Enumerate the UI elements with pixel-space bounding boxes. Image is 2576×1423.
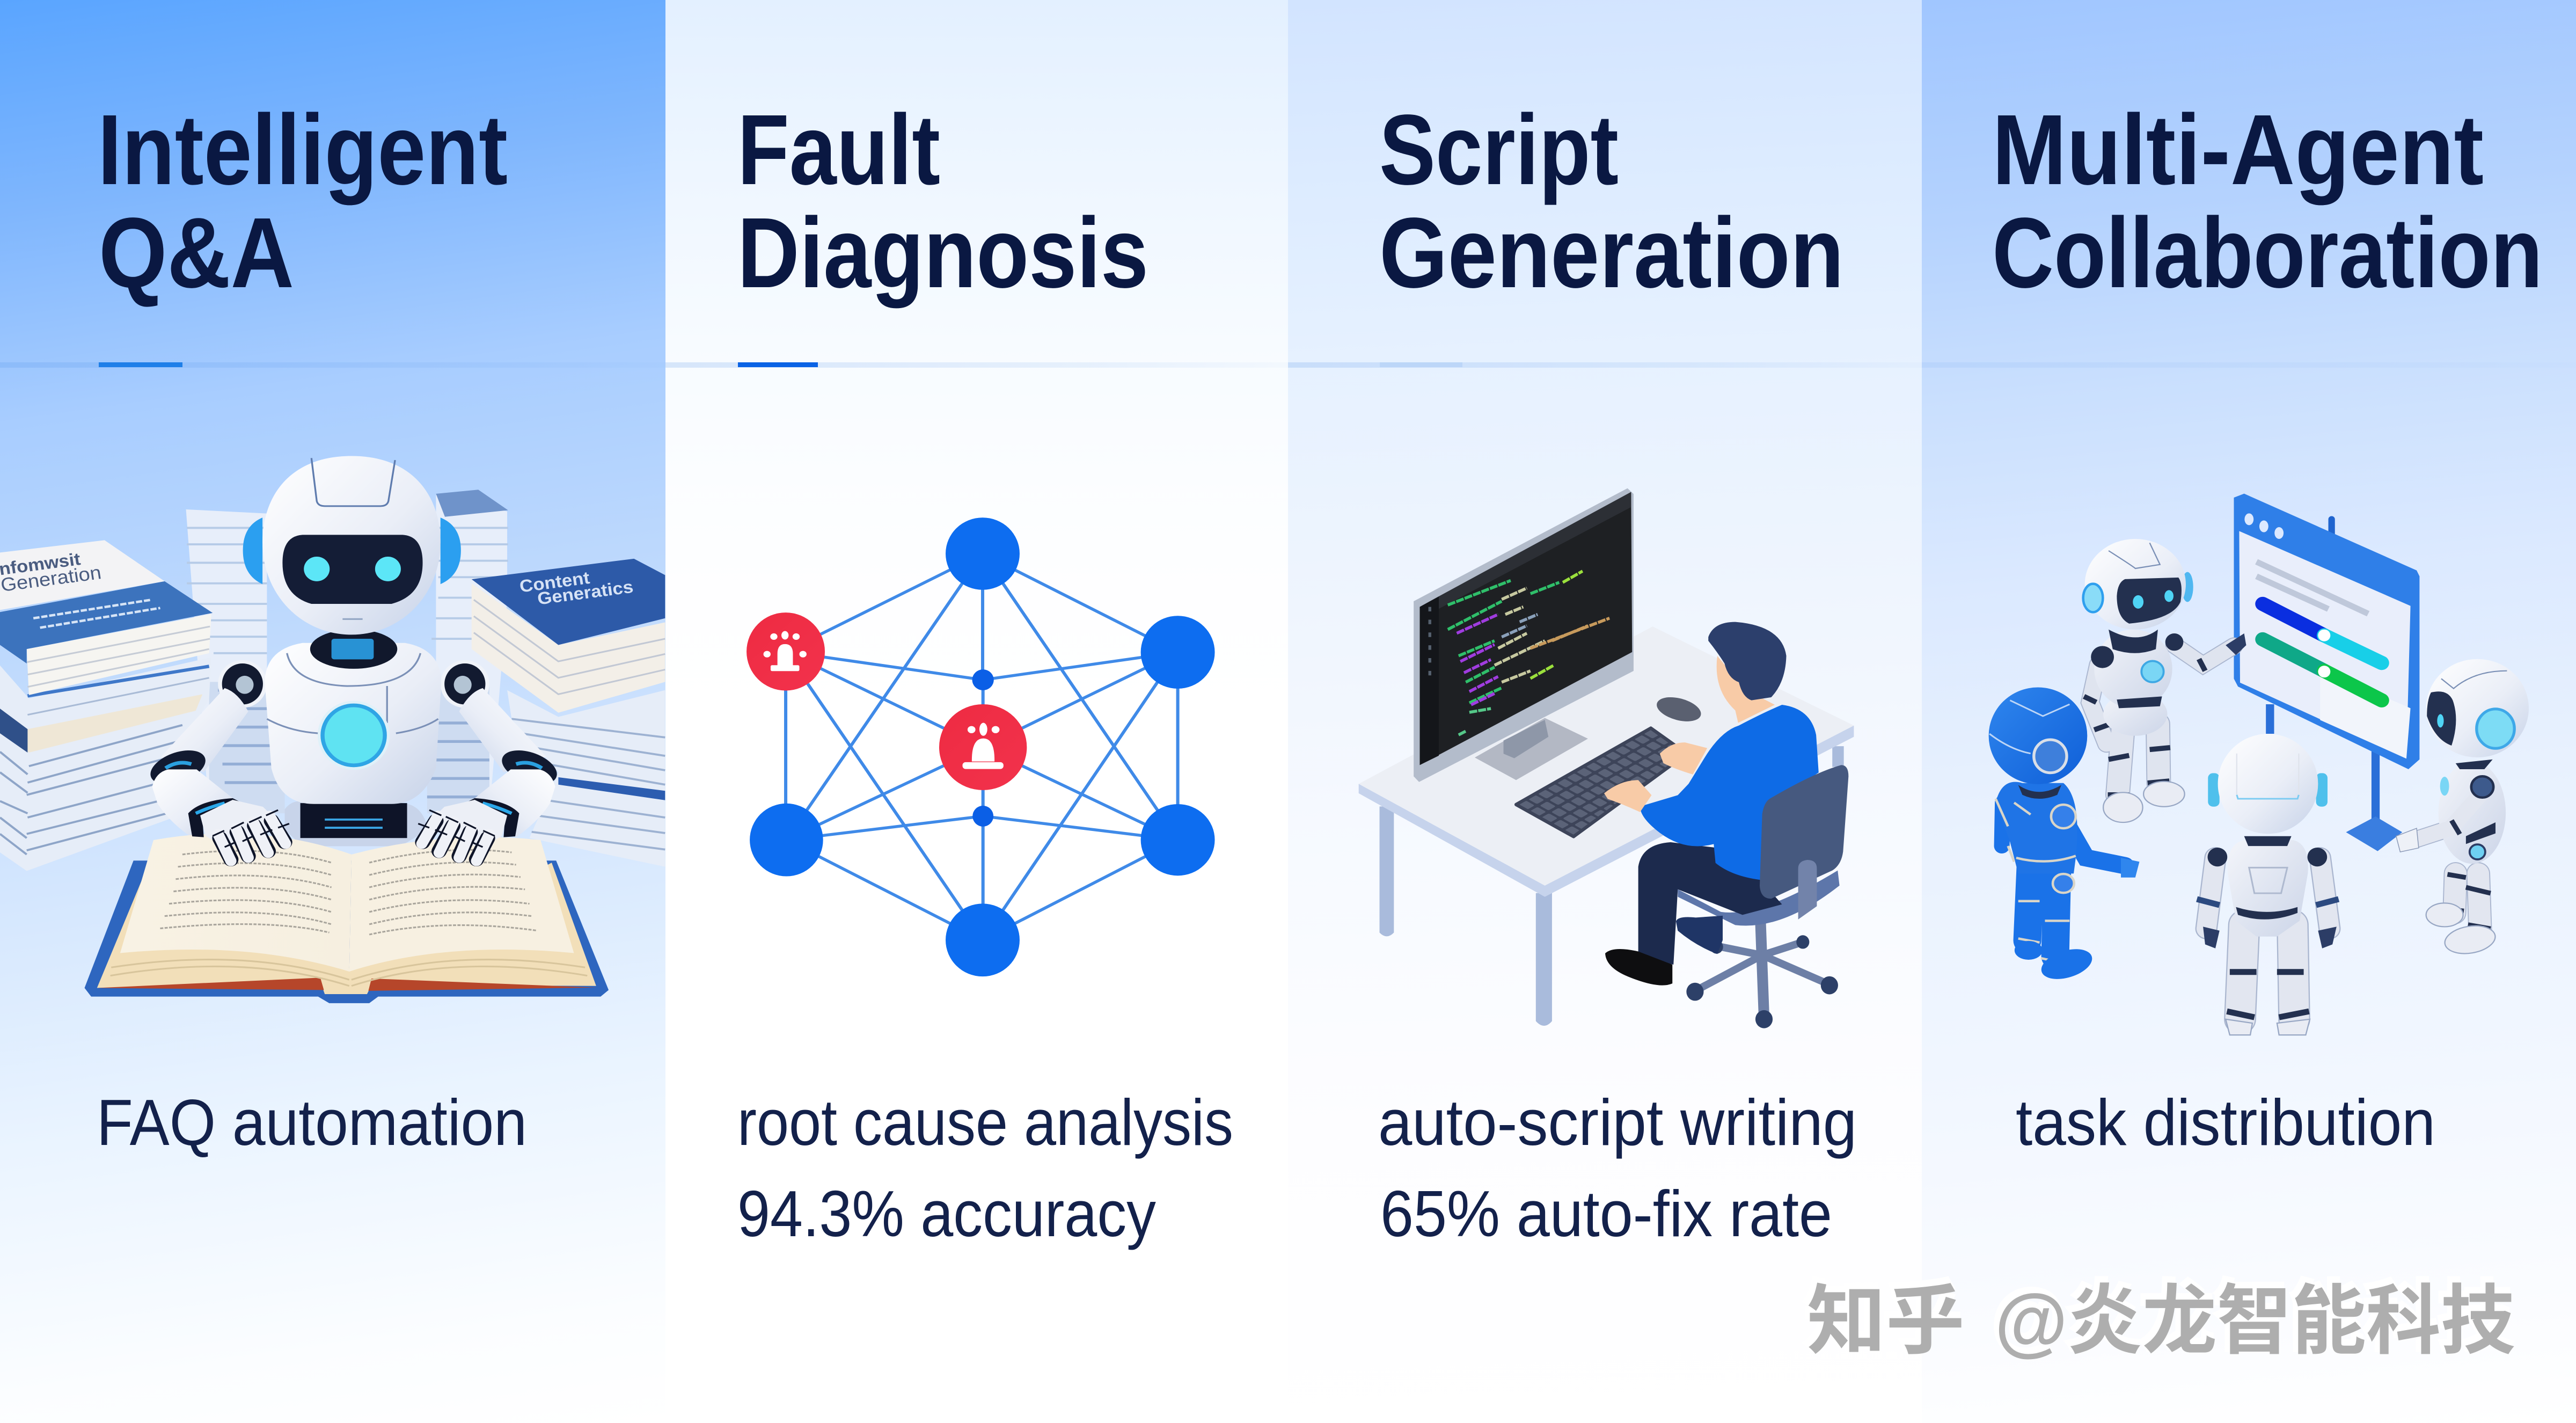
title: Intelligent Q&A: Q&A bbox=[99, 198, 294, 309]
watermark: @炎龙智能科技 bbox=[1995, 1279, 2515, 1364]
title: Intelligent Q&A bbox=[98, 94, 508, 309]
title: Multi-Agent Collaboration: Multi-Agent bbox=[1992, 94, 2484, 206]
chair back bbox=[1760, 765, 1848, 920]
title: Script Generation bbox=[1379, 94, 1844, 309]
watermark: 知乎 bbox=[1804, 1274, 1962, 1360]
keyboard bbox=[1516, 728, 1687, 837]
left book stack: nfomwsit bbox=[0, 550, 82, 579]
subtitle: 94.3% accuracy: 94.3% accuracy bbox=[737, 1177, 1156, 1250]
developer bbox=[1604, 622, 1819, 986]
task board bbox=[2234, 494, 2419, 851]
robot body bbox=[265, 629, 441, 846]
accent bar bbox=[738, 362, 818, 367]
robot: blue bbox=[1989, 688, 2139, 984]
panel: Fault Diagnosis bbox=[665, 0, 1288, 1423]
title: Fault Diagnosis: Fault bbox=[737, 94, 940, 206]
subtitle: FAQ automation: FAQ automation bbox=[97, 1086, 527, 1159]
title: Script Generation: Script bbox=[1379, 94, 1619, 206]
network diagram with two faulty nodes bbox=[747, 517, 1215, 976]
left book stack: Generation bbox=[0, 561, 103, 596]
title: Fault Diagnosis: Diagnosis bbox=[737, 198, 1148, 309]
right book stack bbox=[472, 559, 665, 867]
panel: Intelligent Q&A bbox=[0, 0, 665, 1423]
right book stack: Generatics bbox=[536, 578, 634, 609]
illustration: developer coding at a desk bbox=[1359, 488, 1854, 1028]
robot head bbox=[243, 456, 461, 634]
accent bar bbox=[99, 362, 182, 367]
subtitle: 65% auto-fix rate: 65% auto-fix rate bbox=[1380, 1177, 1832, 1250]
subtitle: root cause analysis: root cause analysis bbox=[737, 1086, 1233, 1159]
title: Intelligent Q&A: Intelligent bbox=[98, 94, 508, 206]
robot: on the right bbox=[2396, 659, 2529, 957]
robot hands bbox=[188, 798, 519, 861]
red alarm node: upper left bbox=[747, 612, 825, 691]
left book stack bbox=[0, 540, 213, 871]
desk bbox=[1359, 626, 1854, 1026]
red alarm node: center bbox=[939, 704, 1027, 790]
panel: Script Generation bbox=[1288, 0, 1922, 1423]
mouse bbox=[1655, 693, 1703, 726]
open book bbox=[85, 834, 609, 1003]
connecting lines bbox=[786, 553, 1178, 940]
accent bar bbox=[1380, 362, 1462, 367]
illustration: robot reading a book among stacks of books bbox=[0, 456, 665, 1003]
right book stack: Content bbox=[518, 568, 591, 596]
robot: seen from behind bbox=[2197, 734, 2339, 1035]
monitor bbox=[1414, 488, 1634, 782]
office chair bbox=[1678, 871, 1840, 1028]
code on screen bbox=[1430, 571, 1609, 735]
watermark: 知乎 bbox=[1807, 1279, 1965, 1364]
subtitle: task distribution: task distribution bbox=[2016, 1086, 2435, 1159]
back book stack bbox=[186, 490, 508, 813]
panel: Multi-Agent Collaboration bbox=[1922, 0, 2576, 1423]
robot: pointing at board bbox=[2083, 539, 2246, 822]
illustration: four robots around a task board bbox=[1989, 494, 2529, 1035]
blue nodes bbox=[750, 517, 1215, 976]
title: Fault Diagnosis bbox=[737, 94, 1148, 309]
robot arms bbox=[145, 660, 562, 837]
title: Script Generation: Generation bbox=[1379, 198, 1844, 309]
title: Multi-Agent Collaboration bbox=[1992, 94, 2543, 309]
watermark: @炎龙智能科技 bbox=[1992, 1274, 2512, 1360]
subtitle: auto-script writing: auto-script writing bbox=[1378, 1086, 1857, 1159]
